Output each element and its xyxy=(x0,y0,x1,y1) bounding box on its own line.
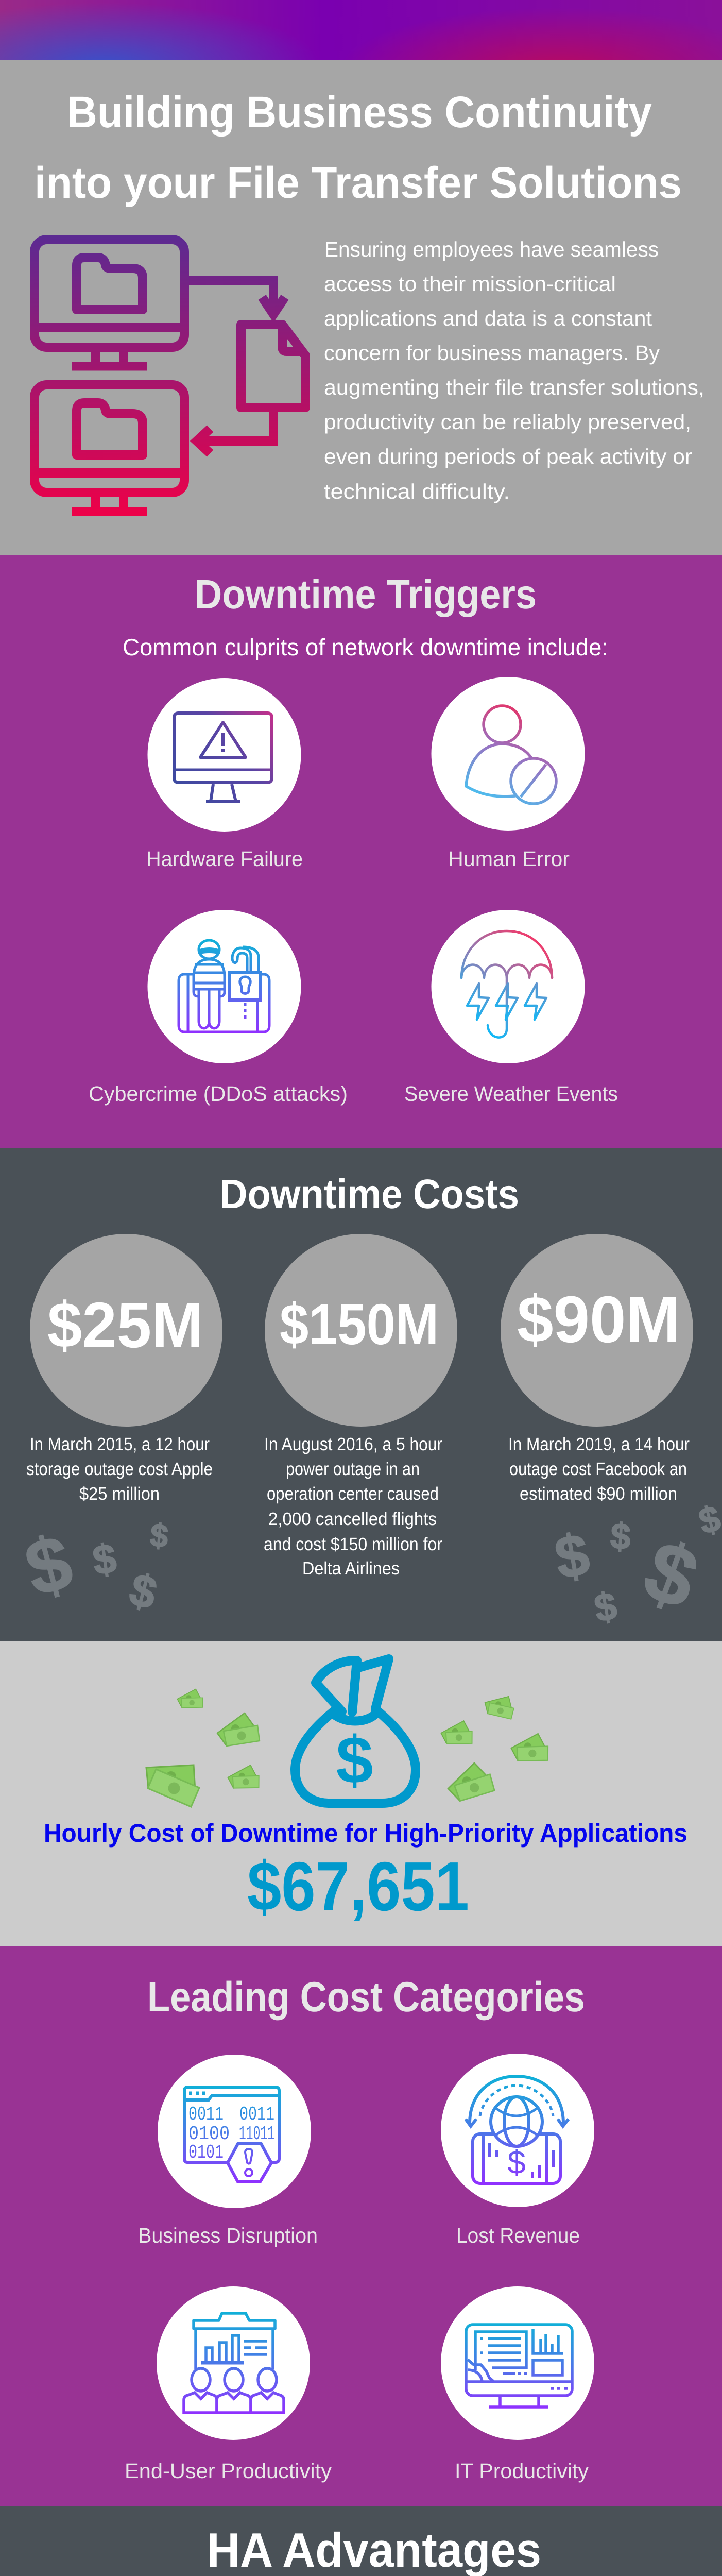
heading: leading cost categories: Leading Cost Categories xyxy=(147,1974,585,2021)
text block: Delta outage: and cost $150 million for xyxy=(264,1534,442,1554)
icon: binary window with warning hexagon: 11011 xyxy=(239,2123,274,2145)
stat: $67,651: $67,651 xyxy=(247,1848,469,1925)
category: end-user productivity xyxy=(125,2286,332,2483)
stat: $25M: $25M xyxy=(47,1290,203,1361)
panel: leading cost categories xyxy=(0,1946,722,2506)
panel: introduction xyxy=(0,60,722,555)
icons: dollar signs left: $ xyxy=(90,1535,119,1584)
icon: presentation board and audience xyxy=(184,2313,284,2413)
text block: Delta outage: operation center caused xyxy=(267,1484,439,1504)
stat: $90M: $90M xyxy=(517,1283,680,1357)
text block: Delta outage: power outage in an xyxy=(286,1459,420,1479)
panel: downtime triggers xyxy=(0,555,722,1148)
category: business disruption xyxy=(138,2055,318,2247)
stat: $90M xyxy=(501,1234,693,1427)
subheading: Common culprits of network downtime include: xyxy=(123,634,608,660)
text block: Apple outage: storage outage cost Apple xyxy=(26,1459,213,1479)
icons: dollar signs left: $ xyxy=(16,1518,81,1613)
panel: downtime costs xyxy=(0,1148,722,1641)
icon: money bag xyxy=(295,1659,416,1803)
trigger: human error xyxy=(432,677,585,871)
icon: binary window with warning hexagon: 0011 xyxy=(239,2104,274,2126)
text block: Facebook outage: outage cost Facebook an xyxy=(509,1459,687,1479)
panel: HA advantages xyxy=(0,2506,722,2576)
title: into your File Transfer Solutions xyxy=(35,158,682,208)
icons: dollar signs left: $ xyxy=(149,1518,169,1554)
label: Severe Weather Events xyxy=(404,1082,618,1106)
text block: intro paragraph: even during periods of peak activity or xyxy=(324,445,692,468)
text block: intro paragraph: technical difficulty. xyxy=(324,480,510,503)
label: Lost Revenue xyxy=(456,2224,580,2247)
stat: $25M xyxy=(30,1234,222,1427)
label: Business Disruption xyxy=(138,2224,318,2247)
category: IT productivity xyxy=(441,2286,594,2483)
top gradient banner xyxy=(0,0,722,61)
stat: $150M: $150M xyxy=(280,1292,439,1357)
text block: Apple outage: $25 million xyxy=(79,1484,160,1504)
label: Cybercrime (DDoS attacks) xyxy=(89,1082,348,1106)
icon: binary window with warning hexagon: 0011 xyxy=(188,2104,224,2126)
icons: dollar signs left xyxy=(16,1518,169,1619)
icon: monitor with dashboards xyxy=(466,2325,572,2407)
icons: dollar signs right: $ xyxy=(610,1516,631,1557)
trigger: cybercrime xyxy=(89,910,348,1106)
icon: money bag: $ xyxy=(336,1722,373,1798)
heading: HA advantages: HA Advantages xyxy=(207,2523,541,2576)
text block: Apple outage xyxy=(26,1434,213,1504)
icon: globe over phone with dollar sign: $ xyxy=(507,2144,526,2181)
icon: binary window with warning hexagon xyxy=(184,2087,279,2182)
text block: intro paragraph xyxy=(324,238,704,503)
icon: binary window with warning hexagon: 0101 xyxy=(188,2142,224,2164)
text block: Facebook outage: In March 2019, a 14 hour xyxy=(508,1434,690,1454)
trigger: hardware failure xyxy=(146,678,303,871)
icon: file transfer between monitors xyxy=(35,240,305,512)
text block: Delta outage: 2,000 cancelled flights xyxy=(268,1509,437,1529)
text block: intro paragraph: access to their mission-critical xyxy=(324,272,616,296)
title xyxy=(35,88,682,208)
label: Human Error xyxy=(448,847,570,871)
icons: dollar signs right: $ xyxy=(550,1521,594,1592)
text block: Apple outage: In March 2015, a 12 hour xyxy=(30,1434,210,1454)
text block: Facebook outage: estimated $90 million xyxy=(520,1484,677,1504)
text block: intro paragraph: productivity can be reliably preserved, xyxy=(324,410,691,434)
label: Hardware Failure xyxy=(146,847,303,871)
text block: Delta outage xyxy=(264,1434,442,1579)
icon: umbrella and lightning xyxy=(461,931,552,1038)
heading: hourly cost: Hourly Cost of Downtime for High-Priority Applications xyxy=(44,1819,687,1848)
heading: downtime costs: Downtime Costs xyxy=(220,1171,519,1217)
text block: Delta outage: Delta Airlines xyxy=(302,1558,400,1579)
text block: Delta outage: In August 2016, a 5 hour xyxy=(264,1434,442,1454)
label: End-User Productivity xyxy=(125,2459,332,2483)
text block: intro paragraph: Ensuring employees have seamless xyxy=(324,238,659,261)
icon: burglar and padlock xyxy=(179,940,269,1032)
icon: binary window with warning hexagon: 0100 xyxy=(188,2123,230,2145)
icons: dollar signs right: $ xyxy=(633,1522,710,1627)
heading: downtime triggers: Downtime Triggers xyxy=(195,571,537,617)
icons: dollar signs right xyxy=(550,1498,722,1630)
icons: dollar signs left: $ xyxy=(125,1563,162,1619)
icons: cash bills xyxy=(146,1687,552,1807)
stat: $150M xyxy=(265,1234,457,1427)
category: lost revenue xyxy=(441,2054,594,2247)
trigger: severe weather xyxy=(404,910,618,1106)
title: Building Business Continuity xyxy=(67,88,652,137)
text block: intro paragraph: applications and data is a constant xyxy=(324,307,652,330)
text block: intro paragraph: concern for business managers. By xyxy=(324,341,660,365)
icon: globe over phone with dollar sign xyxy=(466,2076,569,2183)
text block: Facebook outage xyxy=(508,1434,690,1504)
icon: person with prohibition sign xyxy=(466,706,556,804)
panel: hourly cost xyxy=(0,1641,722,1946)
label: IT Productivity xyxy=(455,2459,589,2483)
icons: dollar signs right: $ xyxy=(591,1584,620,1630)
icon: monitor with warning xyxy=(174,713,272,802)
text block: intro paragraph: augmenting their file transfer solutions, xyxy=(324,376,704,399)
